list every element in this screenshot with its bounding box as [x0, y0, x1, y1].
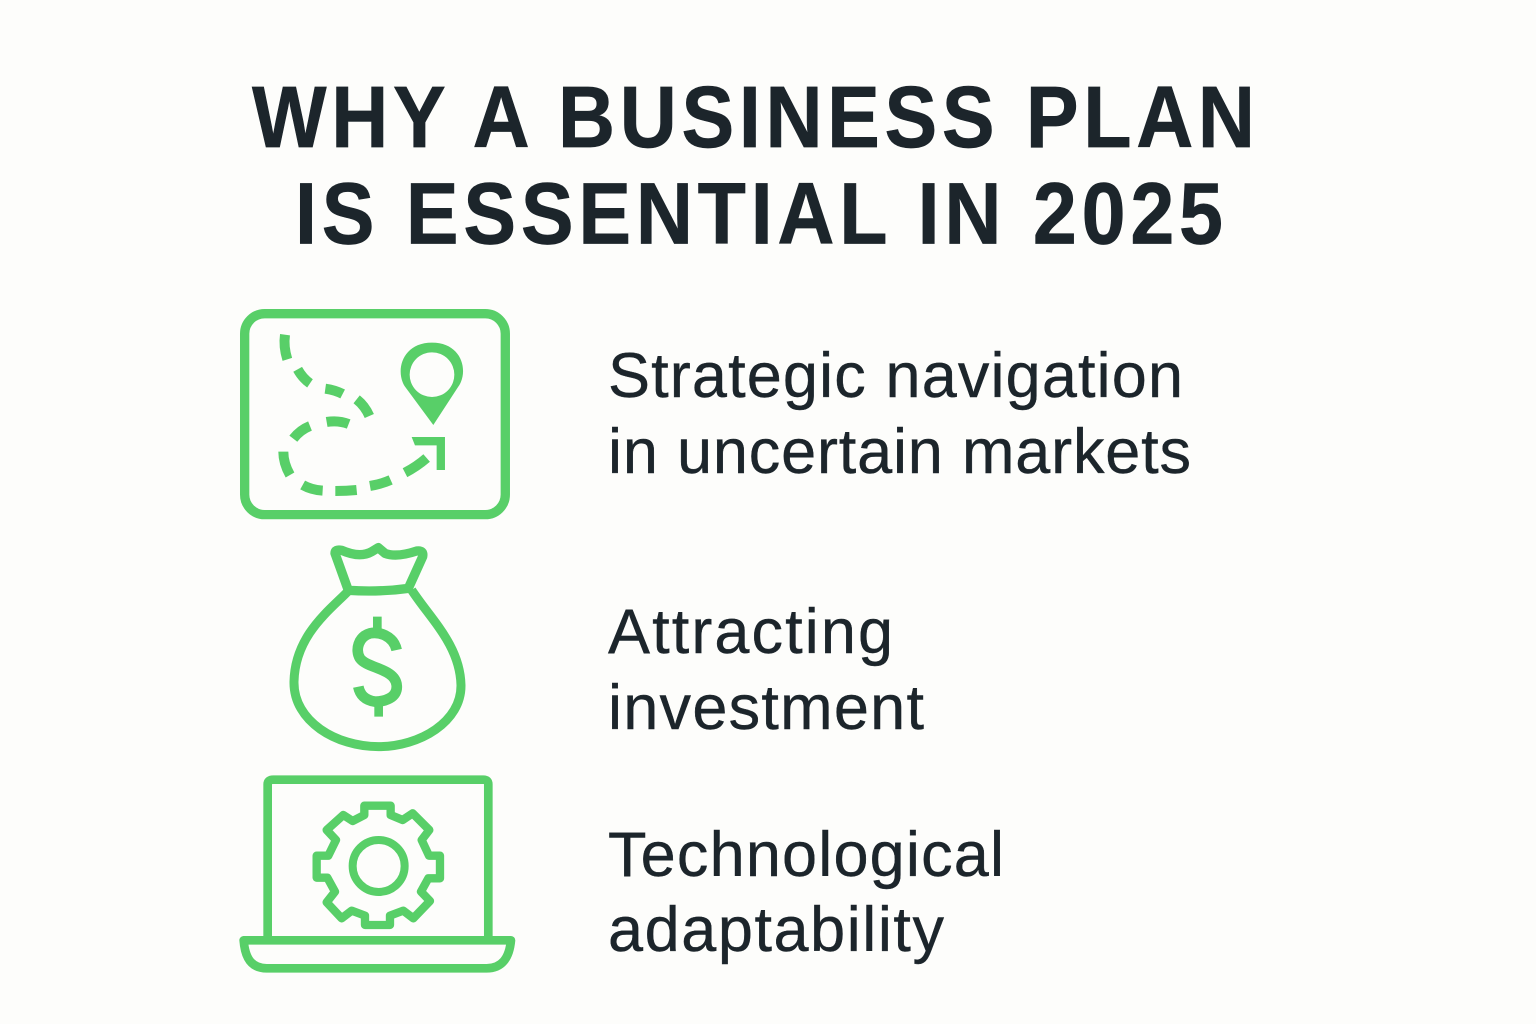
icon: money bag with dollar sign [294, 548, 461, 747]
text: attracting investment [608, 597, 924, 743]
text: technological adaptability: adaptability [608, 895, 944, 965]
title: IS ESSENTIAL IN 2025 [295, 165, 1223, 262]
text: technological adaptability [608, 820, 1004, 965]
icon: map with dashed route and location pin [245, 314, 505, 515]
title [252, 69, 1255, 262]
text: strategic navigation: in uncertain markets [608, 417, 1191, 487]
text: strategic navigation: Strategic navigation [608, 341, 1183, 411]
text: attracting investment: investment [608, 673, 924, 743]
text: strategic navigation [608, 341, 1191, 487]
icon: laptop with gear [244, 780, 511, 968]
text: attracting investment: Attracting [608, 597, 893, 667]
text: technological adaptability: Technological [608, 820, 1004, 890]
title: WHY A BUSINESS PLAN [252, 69, 1255, 166]
